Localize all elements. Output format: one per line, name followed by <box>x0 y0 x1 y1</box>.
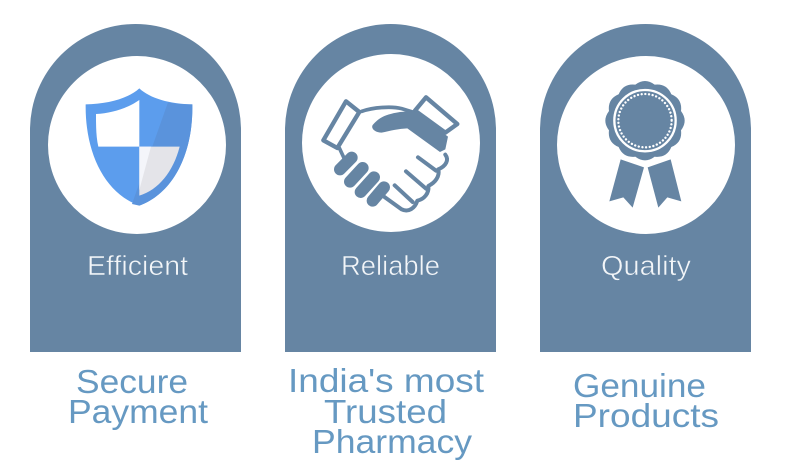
label: Efficient: Efficient <box>87 250 188 281</box>
panel: reliable <box>285 24 496 352</box>
caption: Genuine Products: Products <box>573 397 719 434</box>
caption: Secure Payment <box>68 363 208 430</box>
caption: Secure Payment: Secure <box>76 363 188 400</box>
icon: handshake <box>323 97 457 210</box>
caption: India's most Trusted Pharmacy <box>288 362 484 460</box>
caption: India's most Trusted Pharmacy: Pharmacy <box>312 423 473 460</box>
panel: efficient <box>30 24 241 352</box>
label: Quality: Quality <box>601 250 691 281</box>
panel: quality <box>540 24 751 352</box>
icon: shield <box>86 88 192 206</box>
caption: Genuine Products <box>573 367 719 434</box>
caption: Secure Payment: Payment <box>68 393 208 430</box>
icon: award ribbon <box>605 80 685 208</box>
label: Reliable: Reliable <box>341 250 440 281</box>
caption: India's most Trusted Pharmacy: India's most <box>288 362 484 399</box>
caption: India's most Trusted Pharmacy: Trusted <box>324 393 447 430</box>
caption: Genuine Products: Genuine <box>573 367 706 404</box>
